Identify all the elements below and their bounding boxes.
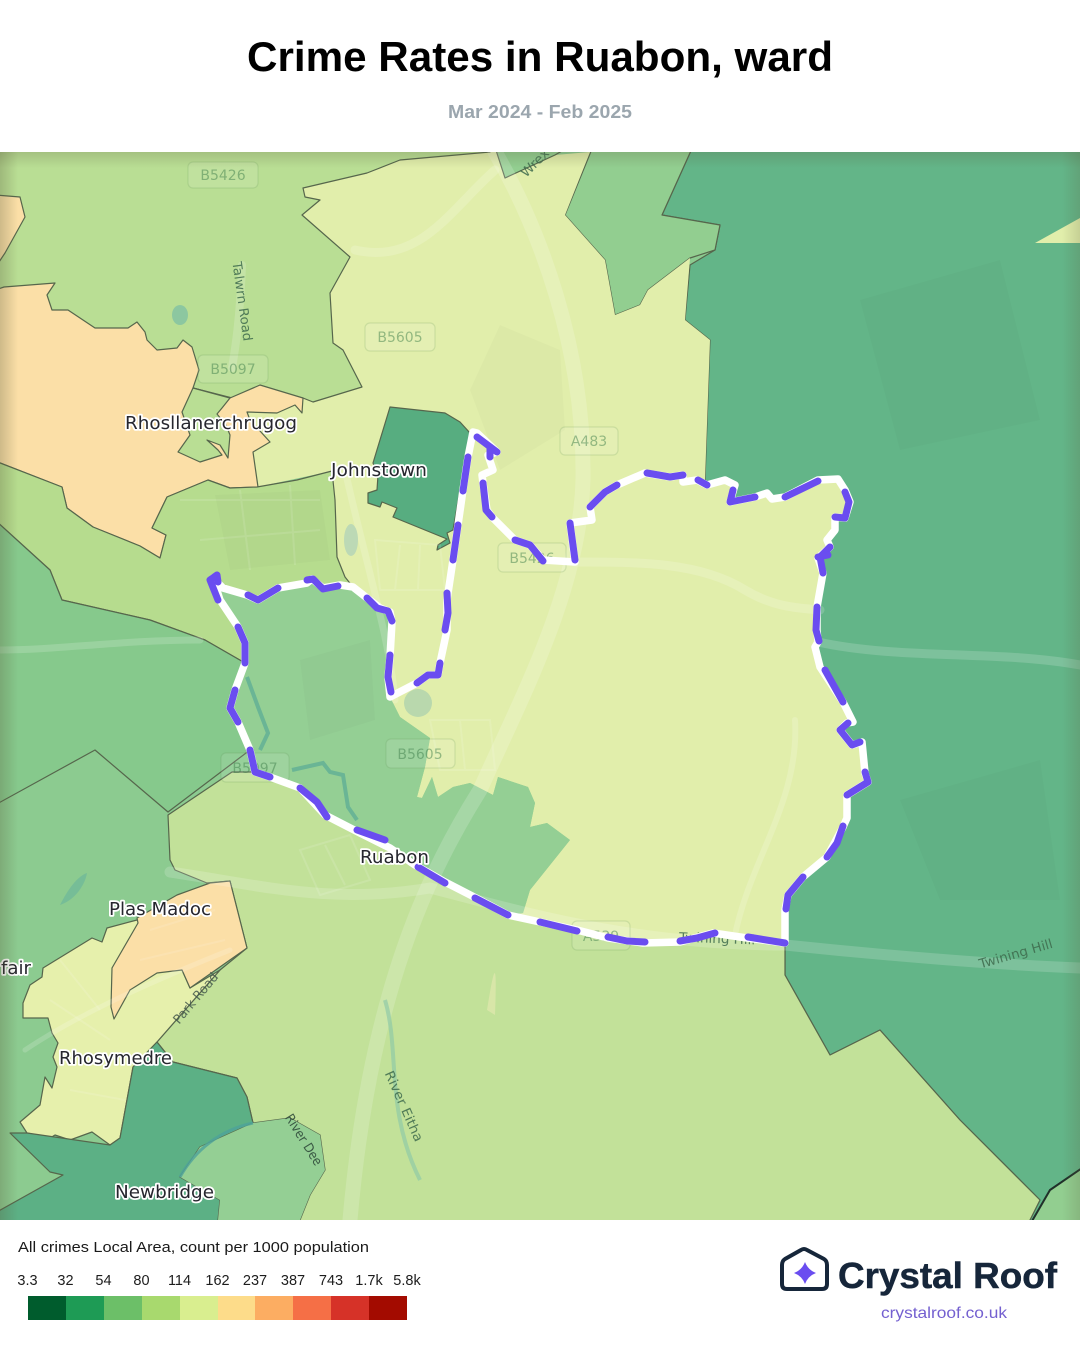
region: mid-green west [0, 520, 250, 812]
street label: Talwrn Road: Talwrn Road [228, 260, 254, 342]
region: Wrexham fragment [496, 152, 562, 179]
legend tick values: 1.7k [355, 1273, 383, 1289]
legend tick values: 5.8k [393, 1273, 421, 1289]
region: orange Plas Madoc [111, 881, 247, 1019]
region: mid-green Ruabon north [392, 700, 570, 914]
place label: Newbridge: Newbridge [115, 1182, 214, 1203]
ward boundary: white outline [213, 432, 868, 943]
street label: Park Road: Park Road [171, 970, 222, 1027]
road label: B5426 south: B5426 [509, 551, 555, 567]
legend tick values: 80 [133, 1273, 150, 1289]
street label: Twining Hill west: Twining Hill [678, 931, 755, 948]
road label: B5097 north: B5097 [210, 362, 256, 378]
place label: Rhosymedre: Rhosymedre [59, 1048, 172, 1069]
logo: Crystal Roof [782, 1249, 1058, 1322]
legend tick values [17, 1273, 421, 1289]
road label: B5605 north: B5605 [377, 330, 423, 346]
street label: Wrexham: Wrex [518, 146, 553, 181]
water: rivers and lakes [60, 305, 496, 1180]
title: Crime Rates in Ruabon, ward [247, 33, 833, 80]
road label: B5097 south: B5097 [232, 761, 278, 777]
road label: B5605 north [365, 323, 435, 351]
land-use shading [215, 260, 1060, 900]
legend title: All crimes Local Area, count per 1000 population [18, 1239, 369, 1256]
logo wordmark: Crystal Roof [838, 1255, 1058, 1296]
icon: house outline [782, 1249, 827, 1289]
road label: B5426 south [498, 543, 566, 572]
legend tick values: 237 [243, 1273, 267, 1289]
region: River Dee green [180, 1118, 325, 1230]
ward boundary: purple dashes [210, 437, 868, 943]
roads [0, 152, 1080, 1220]
road label: B5426 north [188, 162, 258, 188]
region: yellow Rhosymedre [20, 920, 220, 1145]
region: south-east corner edge [1032, 1168, 1080, 1220]
region: yellow-green centre [240, 152, 868, 943]
legend tick values: 3.3 [17, 1273, 38, 1289]
road label: A539 [572, 921, 630, 950]
legend colour swatches [28, 1296, 407, 1320]
icon: purple star [794, 1262, 816, 1284]
subtitle: date range: Mar 2024 - Feb 2025 [448, 101, 632, 122]
legend tick values: 54 [95, 1273, 112, 1289]
map edge fades [0, 152, 1080, 1220]
region: light green Johnstown west [0, 461, 353, 663]
place label: Plas Madoc: Plas Madoc [109, 899, 211, 920]
region: green notch in Rhosllanerchrugog [178, 388, 230, 462]
legend tick values: 162 [205, 1273, 230, 1289]
road label: B5426 north: B5426 [200, 168, 246, 184]
place label: Rhosllanerchrugog: Rhosllanerchrugog [125, 413, 297, 434]
website url: crystalroof.co.uk [881, 1305, 1008, 1322]
legend tick values: 114 [168, 1273, 191, 1289]
place label: Johnstown: Johnstown [330, 460, 427, 481]
region: top-left orange corner [0, 195, 25, 268]
region: light green north-west [0, 144, 498, 402]
region: Johnstown dark green [368, 407, 470, 550]
region: orange Rhosllanerchrugog [0, 283, 303, 558]
road label: B5097 south [221, 753, 289, 782]
road label: B5605 south [386, 739, 455, 768]
region: north-central green [565, 144, 720, 315]
place label: Ruabon: Ruabon [360, 847, 429, 868]
street label: Twining Hill east: Twining Hill [976, 937, 1055, 973]
legend [17, 1239, 421, 1320]
road label: A483 [560, 427, 618, 455]
legend tick values: 32 [57, 1273, 74, 1289]
region: light green south [157, 772, 1040, 1230]
road label: B5605 south: B5605 [397, 747, 443, 763]
road label: B5097 north [198, 355, 268, 383]
road label: A539: A539 [583, 929, 619, 945]
region: north-east yellow fragment [1035, 218, 1080, 243]
town street networks [50, 485, 495, 1100]
map base [0, 152, 710, 1210]
legend tick values: 743 [319, 1273, 343, 1289]
legend tick values: 387 [281, 1273, 305, 1289]
region: dark green east [662, 144, 1080, 1230]
place label: fair (cropped town name): fair [1, 958, 32, 979]
region: dark green Newbridge [0, 1042, 253, 1230]
road label: A483: A483 [571, 434, 607, 450]
street label: River Eitha: River Eitha [381, 1069, 426, 1144]
street label: River Dee: River Dee [281, 1112, 325, 1169]
